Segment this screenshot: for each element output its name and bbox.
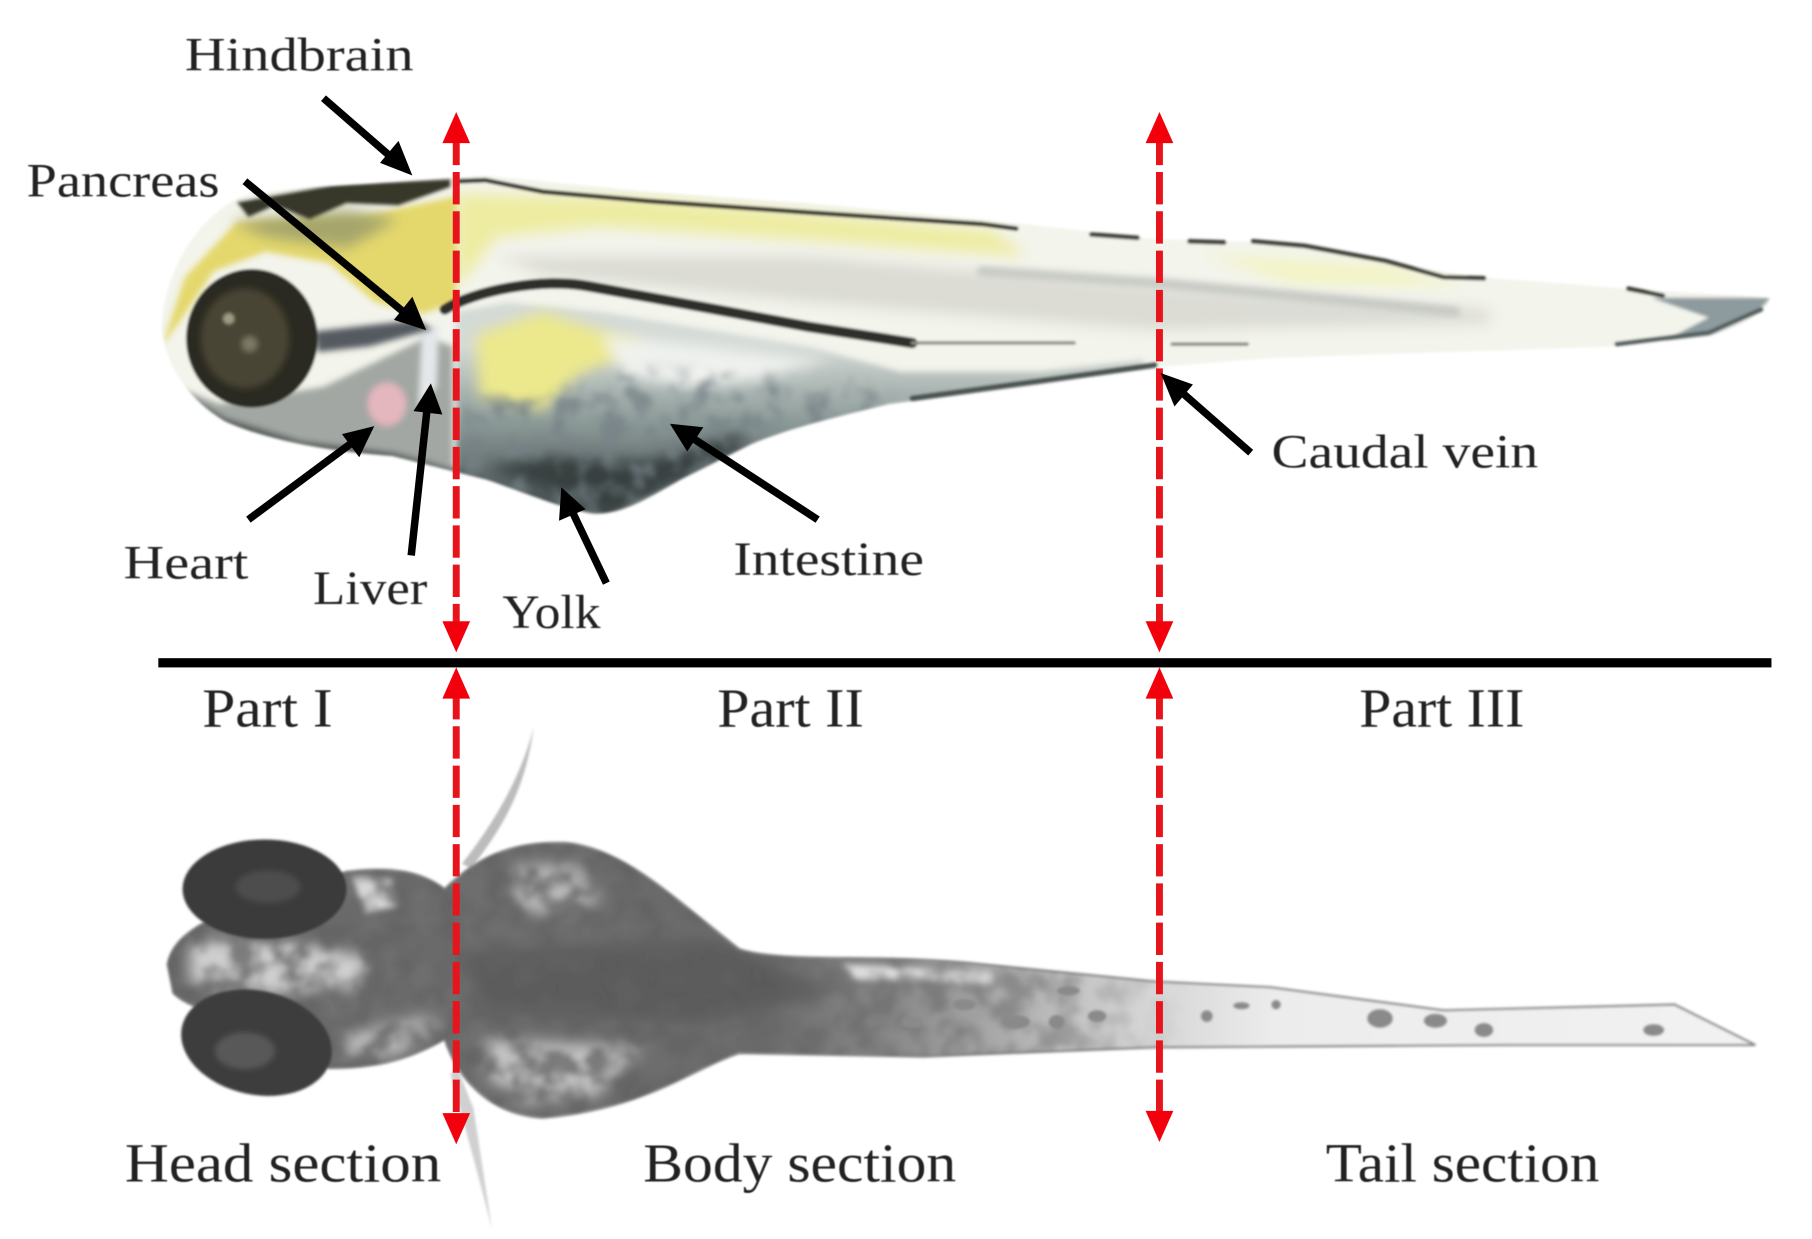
label: Intestine: Intestine [733, 534, 924, 586]
divider bar [158, 658, 1771, 667]
heading: Part I: Part I [202, 677, 333, 738]
arrow: yolk [559, 487, 606, 583]
red line upper left [442, 112, 470, 652]
label: Liver: Liver [313, 563, 428, 615]
black pointer arrows [245, 98, 1251, 583]
heading: Part III: Part III [1359, 677, 1524, 738]
arrow: pancreas [245, 181, 426, 330]
anatomy labels [27, 29, 1538, 639]
heading: Tail section: Tail section [1326, 1132, 1599, 1193]
arrow: caudal vein [1161, 373, 1251, 453]
label: Pancreas: Pancreas [27, 155, 220, 207]
section headings [125, 1132, 1599, 1193]
part headings [202, 677, 1524, 738]
illustration: side view of larva [162, 176, 1770, 520]
label: Heart: Heart [124, 538, 248, 590]
pectoral fins [450, 727, 534, 1230]
arrow: liver [411, 383, 442, 555]
arrow: hindbrain [323, 98, 412, 176]
arrow: heart [248, 426, 374, 520]
heading: Part II: Part II [717, 677, 864, 738]
red line lower right [1146, 667, 1173, 1142]
tail speckles [902, 986, 1664, 1037]
label: Hindbrain: Hindbrain [185, 29, 414, 81]
eyes [171, 839, 347, 1109]
eye [186, 269, 318, 408]
heading: Head section: Head section [125, 1132, 441, 1193]
red line lower left [442, 667, 470, 1144]
red dashed section lines [442, 112, 1173, 1144]
arrow: intestine [670, 424, 818, 520]
label: Caudal vein: Caudal vein [1271, 427, 1538, 479]
illustration: dorsal view of larva [162, 727, 1755, 1230]
heading: Body section: Body section [643, 1132, 956, 1193]
red line upper right [1146, 112, 1173, 652]
dorsal stripe and gut line [445, 180, 1761, 398]
label: Yolk: Yolk [502, 587, 601, 639]
